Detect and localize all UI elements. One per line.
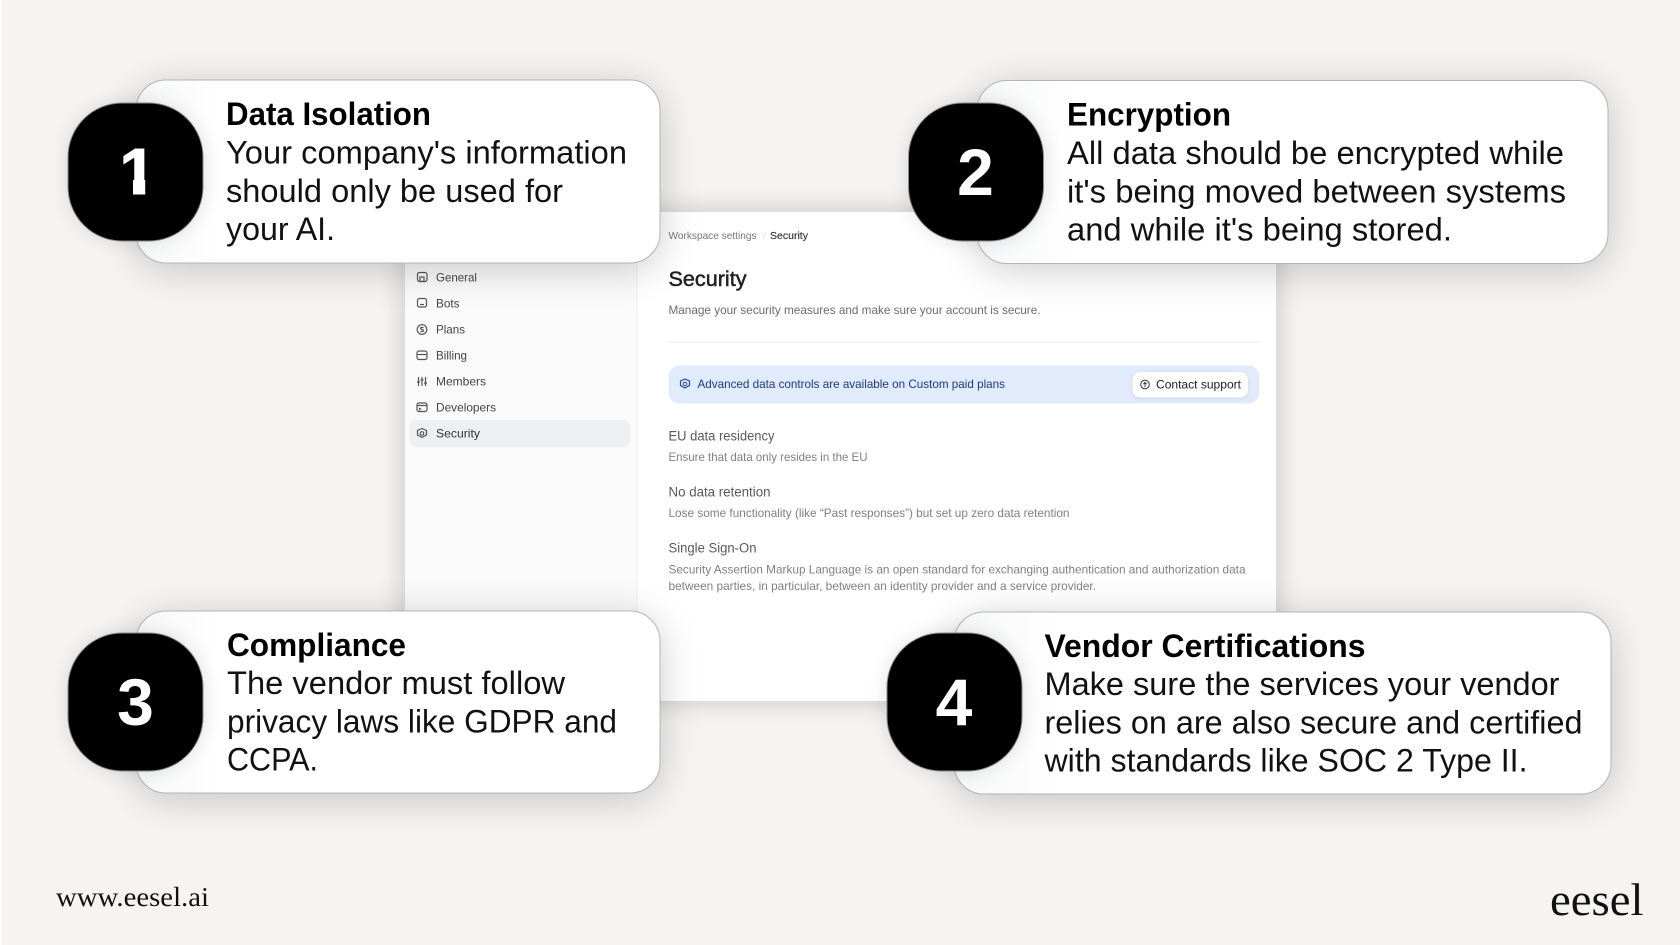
nav: Developers: Developers bbox=[436, 401, 496, 415]
nav: General: General bbox=[436, 271, 477, 285]
banner text: Advanced data controls are available on Custom paid plans bbox=[698, 377, 1005, 391]
setting: single sign-on: Security Assertion Markup Language is an open standard for exchanging authentication and authorization data bbox=[668, 562, 1246, 576]
nav: Billing: Billing bbox=[436, 349, 467, 363]
badge 1: 1 bbox=[119, 134, 156, 208]
callout 3 text: privacy laws like GDPR and bbox=[227, 704, 617, 740]
callout 2 text: and while it's being stored. bbox=[1067, 212, 1452, 248]
breadcrumb: / bbox=[763, 230, 766, 242]
callout 3 text: CCPA. bbox=[227, 742, 318, 778]
button: contact support: Contact support bbox=[1156, 378, 1242, 392]
setting: no data retention bbox=[668, 484, 1070, 520]
nav: Plans bbox=[417, 323, 465, 337]
callout 4 text: Vendor Certifications bbox=[1044, 628, 1366, 664]
breadcrumb bbox=[668, 230, 809, 242]
page subheading: Manage your security measures and make sure your account is secure. bbox=[668, 303, 1040, 317]
setting: single sign-on bbox=[668, 540, 1246, 593]
callout 1 text: your AI. bbox=[226, 211, 335, 247]
setting: EU data residency: EU data residency bbox=[668, 428, 775, 444]
callout 3 text: The vendor must follow bbox=[227, 665, 566, 701]
footer logo: eesel bbox=[1550, 874, 1644, 925]
nav: Bots: Bots bbox=[436, 297, 460, 311]
nav: Members: Members bbox=[436, 375, 486, 389]
callout 1: data isolation bbox=[68, 80, 660, 269]
callout 4 text: relies on are also secure and certified bbox=[1044, 704, 1582, 740]
badge 2: 2 bbox=[957, 135, 994, 209]
callout 4 text: with standards like SOC 2 Type II. bbox=[1043, 742, 1528, 778]
nav: Plans: Plans bbox=[436, 323, 465, 337]
banner: advanced data controls bbox=[668, 366, 1260, 404]
nav: General bbox=[418, 271, 477, 285]
setting: EU data residency: Ensure that data only resides in the EU bbox=[668, 450, 868, 464]
badge 3: 3 bbox=[117, 665, 154, 739]
nav: Billing bbox=[417, 349, 467, 363]
badge 1 bbox=[68, 103, 203, 241]
callout 1 text: Data Isolation bbox=[226, 96, 431, 132]
setting: single sign-on: Single Sign-On bbox=[668, 540, 756, 556]
setting: no data retention: Lose some functionality (like “Past responses”) but set up zero data retention bbox=[668, 506, 1070, 520]
page heading: Security bbox=[668, 268, 747, 291]
badge 2 bbox=[908, 103, 1044, 241]
sidebar bbox=[405, 212, 638, 701]
nav: Security: Security bbox=[436, 427, 480, 441]
callout 4: vendor certifications bbox=[887, 612, 1611, 800]
callout 1 text: Your company's information bbox=[226, 134, 627, 170]
active row highlight bbox=[410, 420, 630, 447]
nav: Bots bbox=[418, 297, 460, 311]
icon: shield bbox=[680, 379, 690, 388]
callout 1 text: should only be used for bbox=[226, 173, 563, 209]
footer url: www.eesel.ai bbox=[56, 881, 209, 912]
callout 3 text: Compliance bbox=[227, 627, 406, 663]
badge 4: 4 bbox=[936, 665, 973, 739]
breadcrumb: Workspace settings bbox=[668, 230, 756, 242]
setting: EU data residency bbox=[668, 428, 868, 464]
callout 2 text: All data should be encrypted while bbox=[1067, 135, 1564, 171]
callout 1 text bbox=[226, 96, 627, 247]
callout 4 text: Make sure the services your vendor bbox=[1044, 666, 1560, 702]
badge 3 bbox=[68, 633, 203, 771]
callout 3: compliance bbox=[68, 611, 660, 799]
callout 4 text bbox=[1043, 628, 1582, 778]
setting: single sign-on: between parties, in particular, between an identity provider and a service provider. bbox=[668, 579, 1096, 593]
nav: Security bbox=[418, 427, 480, 441]
badge 4 bbox=[887, 633, 1022, 771]
callout 3 text bbox=[227, 627, 617, 778]
callout 2 text: it's being moved between systems bbox=[1067, 174, 1566, 210]
callout 2 text: Encryption bbox=[1067, 96, 1231, 132]
button: contact support bbox=[1132, 372, 1248, 398]
panel: security settings screenshot bbox=[405, 212, 1276, 701]
callout 2 text bbox=[1067, 96, 1566, 248]
callout 2: encryption bbox=[908, 80, 1608, 270]
breadcrumb: Security bbox=[770, 230, 809, 242]
setting: no data retention: No data retention bbox=[668, 484, 770, 500]
